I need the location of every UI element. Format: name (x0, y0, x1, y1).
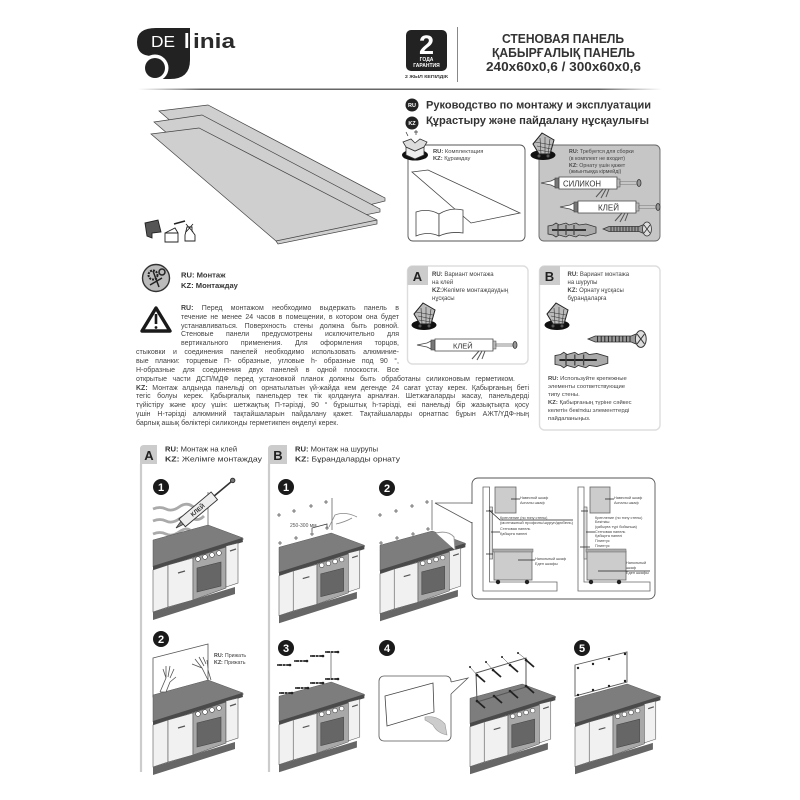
card B notes: келетін бекіткіш элементтерді (548, 408, 629, 414)
card B: screw option (540, 266, 660, 430)
step A2: pressing: KZ: Прижать (214, 660, 246, 666)
icon: cart (544, 303, 570, 330)
instructions text: вые планки: торцевые П- образные, угловые h- образные под 90 °, (136, 358, 399, 365)
left section (483, 487, 574, 591)
panel: required tools: (жиынтыққа кірмейді) (569, 168, 622, 175)
instructions text: тегіс болуы керек. Қабырғалық панельдер тек тік қолдануға арналған. Шетжағаларды жасау, панельдерді (136, 393, 529, 400)
screw (588, 331, 646, 347)
instructions text: Н-образные для соединения двух панелей в одной плоскости. Все (136, 367, 399, 374)
step B5: finished panel (574, 640, 660, 774)
icon: book (416, 209, 463, 236)
right section: Аспалы шкаф (614, 501, 639, 505)
panel: contents: RU: Комплектация (433, 149, 483, 155)
step A2: pressing: RU: Прижать (214, 653, 246, 659)
title (486, 31, 641, 74)
icon: cart (530, 133, 556, 160)
right section: Қабырға панелі (595, 534, 622, 538)
manual heading: Құрастыру және пайдалану нұсқаулығы (426, 115, 649, 127)
instructions text: Стеновые панели предусмотрены исключительно для (181, 331, 399, 338)
instructions text: KZ: Монтаж алдында панельді оп орнатылатын үй-жайда кем дегенде 24 сағат ұстау керек. Қабырғаның беті (136, 384, 529, 392)
left section: Навесной шкаф (520, 496, 548, 500)
section heading: mounting: RU: Монтаж (181, 270, 226, 280)
step B3: inserting dowels: 3 (283, 643, 289, 655)
callout: wall section details (435, 478, 655, 599)
panel: required tools: RU: Требуется для сборки (569, 149, 634, 155)
panel: contents (402, 130, 525, 241)
step B4: fixing the panel: 4 (384, 643, 391, 655)
instructions text: открытые части ДСП/МДФ перед установкой планок должны быть обработаны силиконовым герметиком. (136, 376, 515, 383)
manual heading (426, 100, 651, 127)
card A: glue option: на клей (432, 279, 453, 286)
callout: drilling panel (379, 676, 468, 741)
card B notes (548, 375, 632, 422)
title: ҚАБЫРҒАЛЫҚ ПАНЕЛЬ (492, 45, 635, 60)
step B1: marking holes: 1 (283, 482, 289, 494)
step A1: applying glue (153, 475, 243, 620)
right section: Плинтус (595, 544, 610, 548)
warranty badge (405, 30, 448, 80)
card A: glue option: KZ:Желімге монтаждаудың (432, 288, 509, 294)
step A1: applying glue: 1 (158, 482, 164, 494)
column B heading: B (273, 448, 283, 463)
dowel (548, 223, 596, 237)
section heading: mounting: KZ: Монтаждау (181, 281, 239, 290)
right section: (қабырға түрі бойынша) (595, 525, 638, 529)
card B: screw option: бұрандаларға (568, 296, 607, 302)
right section: Стеновая панель (595, 530, 625, 534)
step B3: inserting dowels (277, 640, 364, 772)
step B1: marking holes (277, 479, 364, 623)
step B2: drilling: 2 (384, 483, 390, 495)
step B5: finished panel: 5 (579, 643, 585, 655)
glue gun: КЛЕЙ (189, 502, 206, 518)
instructions text: устанавливаться. Поверхность стены должна быть ровной. (181, 322, 399, 330)
glue tube: КЛЕЙ (453, 342, 473, 350)
icon: warning (142, 308, 170, 331)
title: СТЕНОВАЯ ПАНЕЛЬ (502, 31, 624, 46)
icon: box (402, 130, 428, 160)
card A: glue option: RU: Вариант монтажа (432, 272, 494, 278)
divider (456, 27, 458, 82)
panel drawing (412, 170, 520, 223)
column B heading (268, 444, 400, 772)
card B: screw option: на шурупы (568, 280, 597, 286)
card A: glue option (408, 266, 528, 364)
step B4: fixing the panel (379, 640, 556, 774)
card B notes: пайдаланыңыз. (548, 415, 591, 422)
glue tube: КЛЕЙ (598, 204, 619, 212)
instructions text: үшін Н-тәрізді алюминий тақтайшаларын пайдалану қажет. Тақтайшаларды орнатпас бұрын АЖТ/ҮДФ-ның (136, 411, 529, 418)
right section: Навесной шкаф (614, 496, 642, 500)
hands (160, 657, 211, 692)
right section: шкаф (626, 566, 636, 570)
warranty badge: ГАРАНТИЯ (413, 63, 440, 69)
column B heading: KZ: Бұрандаларды орнату (295, 454, 400, 464)
instructions text (136, 304, 529, 427)
instructions text: түйістіру және қосу үшін: шетжақтық П-тәрізді, 90 ° бұрыштық h-тәрізді, екі панельді бір жазықтықта қосу (136, 402, 529, 409)
hand with pencil (329, 513, 357, 527)
card A: glue option: нұсқасы (432, 296, 455, 302)
card B notes: KZ: Қабырғаның түріне сәйкес (548, 399, 632, 406)
language badges (406, 98, 418, 130)
screw (603, 222, 652, 236)
instructions text: барлық ашық бөліктері силиконды герметикпен өңделуі керек. (136, 420, 338, 427)
panel: contents: KZ: Құрамдау (433, 156, 471, 162)
wall panels illustration (151, 105, 385, 244)
left section: Қабырға панелі (500, 532, 527, 536)
language badges: RU (408, 103, 416, 109)
care icons (145, 220, 195, 242)
step A2: pressing (153, 631, 246, 775)
silicone tube: СИЛИКОН (563, 180, 601, 188)
panel: required tools (530, 133, 660, 241)
left section: Еден шкафы (535, 562, 558, 566)
left section: (монтажный профиль/шуруп/дюбель) (500, 521, 574, 525)
logo: DE (151, 34, 175, 51)
logo: inia (193, 31, 236, 53)
icon: cart (412, 303, 436, 330)
card B notes: RU: Используйте крепежные (548, 375, 628, 382)
icon: tools (142, 264, 170, 292)
column A heading: A (144, 448, 154, 463)
right section (578, 487, 650, 591)
panel: required tools: KZ: Орнату үшін қажет (569, 163, 626, 169)
left section: Стеновая панель (500, 527, 530, 531)
language badges: KZ (408, 121, 416, 127)
dowel (555, 352, 608, 368)
instructions text: RU: Перед монтажом необходимо выдержать панель в (181, 305, 399, 312)
column A heading (140, 444, 262, 772)
card B: screw option: RU: Вариант монтажа (568, 272, 630, 278)
instructions text: вертикального применения. Для оформления торцов, (181, 340, 399, 347)
right section: Крепление (по типу стены) (595, 516, 643, 520)
card B: screw option: KZ: Орнату нұсқасы (568, 288, 624, 294)
instructions text: стыковки и соединения панелей необходимо использовать алюминие- (136, 349, 399, 356)
step B2: drilling (378, 480, 466, 621)
card B: screw option: B (545, 269, 554, 284)
panel: required tools: (в комплект не входит) (569, 156, 625, 162)
warranty badge: 2 (419, 30, 434, 60)
left section: Аспалы шкаф (520, 501, 545, 505)
section heading: mounting (181, 270, 239, 290)
logo: l (184, 31, 190, 53)
instructions text: течение не менее 24 часов в помещении, в котором она будет (181, 314, 399, 321)
step B1: marking holes: 250-300 мм (290, 523, 317, 529)
right section: Еден шкафы (626, 571, 649, 575)
column A heading: KZ: Желімге монтаждау (165, 454, 262, 464)
warranty badge: 2 ЖЫЛ КЕПІЛДІК (405, 74, 448, 80)
card B notes: типу стены. (548, 392, 580, 398)
warranty badge: ГОДА (420, 57, 434, 63)
right section: Бекіткіш (595, 520, 609, 524)
title: 240x60x0,6 / 300x60x0,6 (486, 59, 641, 74)
left section: Крепление (по типу стены) (500, 516, 548, 520)
column B heading: RU: Монтаж на шурупы (295, 444, 378, 454)
card B notes: элементы соответствующие (548, 384, 626, 390)
left section: Напольный шкаф (535, 557, 566, 561)
column A heading: RU: Монтаж на клей (165, 444, 237, 454)
glue gun (173, 475, 238, 532)
step A2: pressing: 2 (158, 634, 164, 646)
right section: Плинтус (595, 539, 610, 543)
card A: glue option: A (413, 269, 423, 284)
manual heading: Руководство по монтажу и эксплуатации (426, 100, 651, 112)
logo (137, 28, 236, 82)
right section: Напольный (626, 561, 646, 565)
